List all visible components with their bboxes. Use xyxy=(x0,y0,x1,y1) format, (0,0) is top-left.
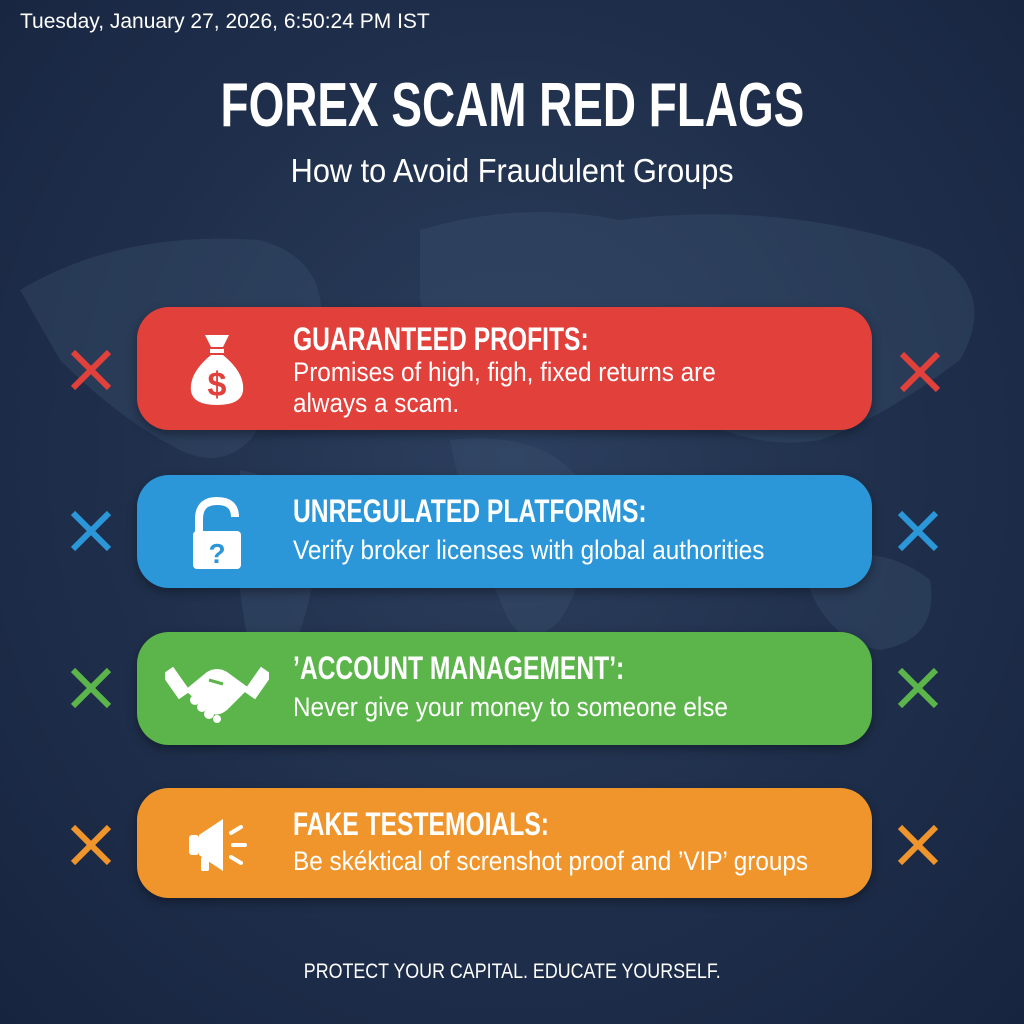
card: unregulated platforms xyxy=(137,475,872,588)
card: unregulated platforms: UNREGULATED PLATFORMS: xyxy=(293,493,647,529)
card: account management xyxy=(137,632,872,745)
card: fake testimonials: Be skéktical of screnshot proof and ’VIP’ groups xyxy=(293,846,808,876)
card: fake testimonials xyxy=(137,788,872,898)
footer: PROTECT YOUR CAPITAL. EDUCATE YOURSELF. xyxy=(304,960,720,983)
card: guaranteed profits: Promises of high, figh, fixed returns are xyxy=(293,357,716,387)
icon: red x left xyxy=(70,350,111,390)
icon: handshake xyxy=(165,666,269,723)
icon: blue x right xyxy=(898,510,938,552)
icon: megaphone xyxy=(189,819,247,871)
card: guaranteed profits: GUARANTEED PROFITS: xyxy=(293,321,589,357)
card: account management: ’ACCOUNT MANAGEMENT’: xyxy=(293,650,624,686)
icon: red x right xyxy=(900,352,940,392)
card: guaranteed profits xyxy=(137,307,872,430)
subtitle: How to Avoid Fraudulent Groups xyxy=(290,152,733,189)
card: account management: Never give your money to someone else xyxy=(293,692,728,722)
icon: green x left xyxy=(71,668,111,708)
icon: green x right xyxy=(898,668,938,708)
icon: padlock: ? xyxy=(208,538,226,569)
icon: money bag xyxy=(190,335,244,405)
card: unregulated platforms: Verify broker licenses with global authorities xyxy=(293,535,764,565)
card: guaranteed profits: always a scam. xyxy=(293,388,459,418)
title: FOREX SCAM RED FLAGS xyxy=(220,71,804,140)
card: fake testimonials: FAKE TESTEMOIALS: xyxy=(293,806,549,842)
icon: blue x left xyxy=(71,510,111,552)
icon: padlock xyxy=(193,497,241,569)
icon: orange x left xyxy=(70,824,112,866)
icon: money bag: $ xyxy=(208,366,227,404)
date: Tuesday, January 27, 2026, 6:50:24 PM IST xyxy=(20,10,430,33)
icon: orange x right xyxy=(898,824,938,866)
